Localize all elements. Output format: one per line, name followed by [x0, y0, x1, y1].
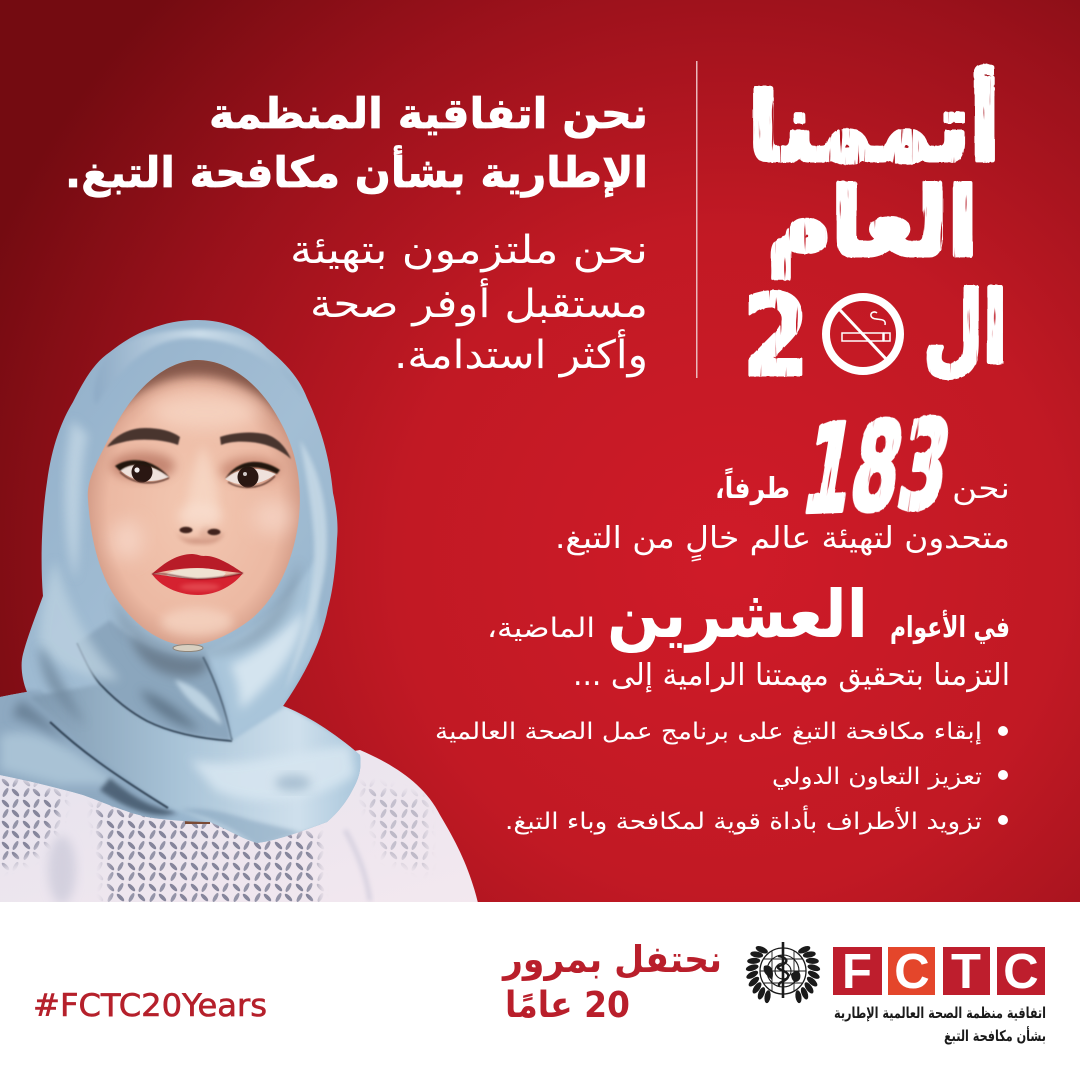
commitment text: مستقبل أوفر صحة: [310, 278, 648, 327]
FCTC logo: [833, 945, 1046, 1045]
parties statement: طرفاً،: [715, 468, 790, 505]
brush title: أتممنا: [748, 67, 1000, 183]
brooch: [173, 644, 203, 652]
laurel wreath: [745, 944, 821, 1004]
commitment text: [290, 228, 648, 378]
left eyebrow: [107, 428, 180, 447]
chin wrap: [77, 620, 232, 741]
portrait photo illustration: [0, 310, 478, 904]
logo caption: [834, 1004, 1046, 1045]
main heading: [65, 89, 648, 198]
main heading: الإطارية بشأن مكافحة التبغ.: [65, 145, 648, 198]
number 183: 183: [794, 395, 960, 542]
face: [88, 350, 300, 652]
twenty years statement: في الأعوام: [890, 609, 1010, 644]
left eye: [111, 452, 175, 483]
logo tiles: [833, 945, 1045, 999]
icon: WHO emblem: [745, 942, 821, 1004]
brush title: ال: [923, 272, 1007, 386]
bullet 2: تعزيز التعاون الدولي: [772, 764, 982, 790]
footer band: [0, 902, 1080, 1080]
divider: [696, 61, 698, 378]
right eye: [220, 457, 280, 488]
brush title: 2: [742, 272, 810, 402]
logo tiles: C: [1003, 945, 1039, 999]
celebration text: 20 عامًا: [505, 985, 630, 1026]
logo caption: بشأن مكافحة التبغ: [944, 1026, 1046, 1045]
lips: [152, 554, 243, 595]
drape left: [0, 690, 180, 825]
logo tiles: C: [894, 945, 930, 999]
commitment text: وأكثر استدامة.: [394, 329, 648, 378]
twenty years statement: [487, 576, 1010, 693]
logo tiles: F: [842, 945, 872, 999]
brush title: العام: [767, 169, 978, 279]
blouse: [0, 750, 478, 904]
celebration text: [501, 938, 722, 1026]
sweeping band: [30, 684, 365, 846]
icon: no smoking zero: [826, 297, 900, 371]
main heading: نحن اتفاقية المنظمة: [209, 89, 648, 139]
head highlights: [40, 329, 327, 725]
parties statement: [555, 395, 1010, 563]
bullet list: [435, 719, 1008, 835]
hijab: [0, 310, 370, 850]
hashtag: #FCTC20Years: [33, 988, 267, 1024]
bullet 3: تزويد الأطراف بأداة قوية لمكافحة وباء التبغ.: [505, 805, 982, 835]
twenty years statement: الماضية،: [487, 613, 595, 644]
twenty years statement: العشرين: [607, 576, 868, 653]
brush title: [742, 67, 1007, 402]
commitment text: نحن ملتزمون بتهيئة: [290, 228, 648, 273]
parties statement: نحن: [952, 471, 1010, 505]
bullet 1: إبقاء مكافحة التبغ على برنامج عمل الصحة العالمية: [435, 719, 982, 745]
right neck fold: [205, 560, 320, 740]
parties statement: متحدون لتهيئة عالم خالٍ من التبغ.: [555, 521, 1010, 563]
right eyebrow: [220, 433, 291, 459]
celebration text: نحتفل بمرور: [501, 938, 722, 981]
logo tiles: T: [951, 945, 981, 999]
nose: [176, 503, 224, 544]
twenty years statement: التزمنا بتحقيق مهمتنا الرامية إلى ...: [573, 658, 1010, 693]
globe: [760, 942, 806, 998]
